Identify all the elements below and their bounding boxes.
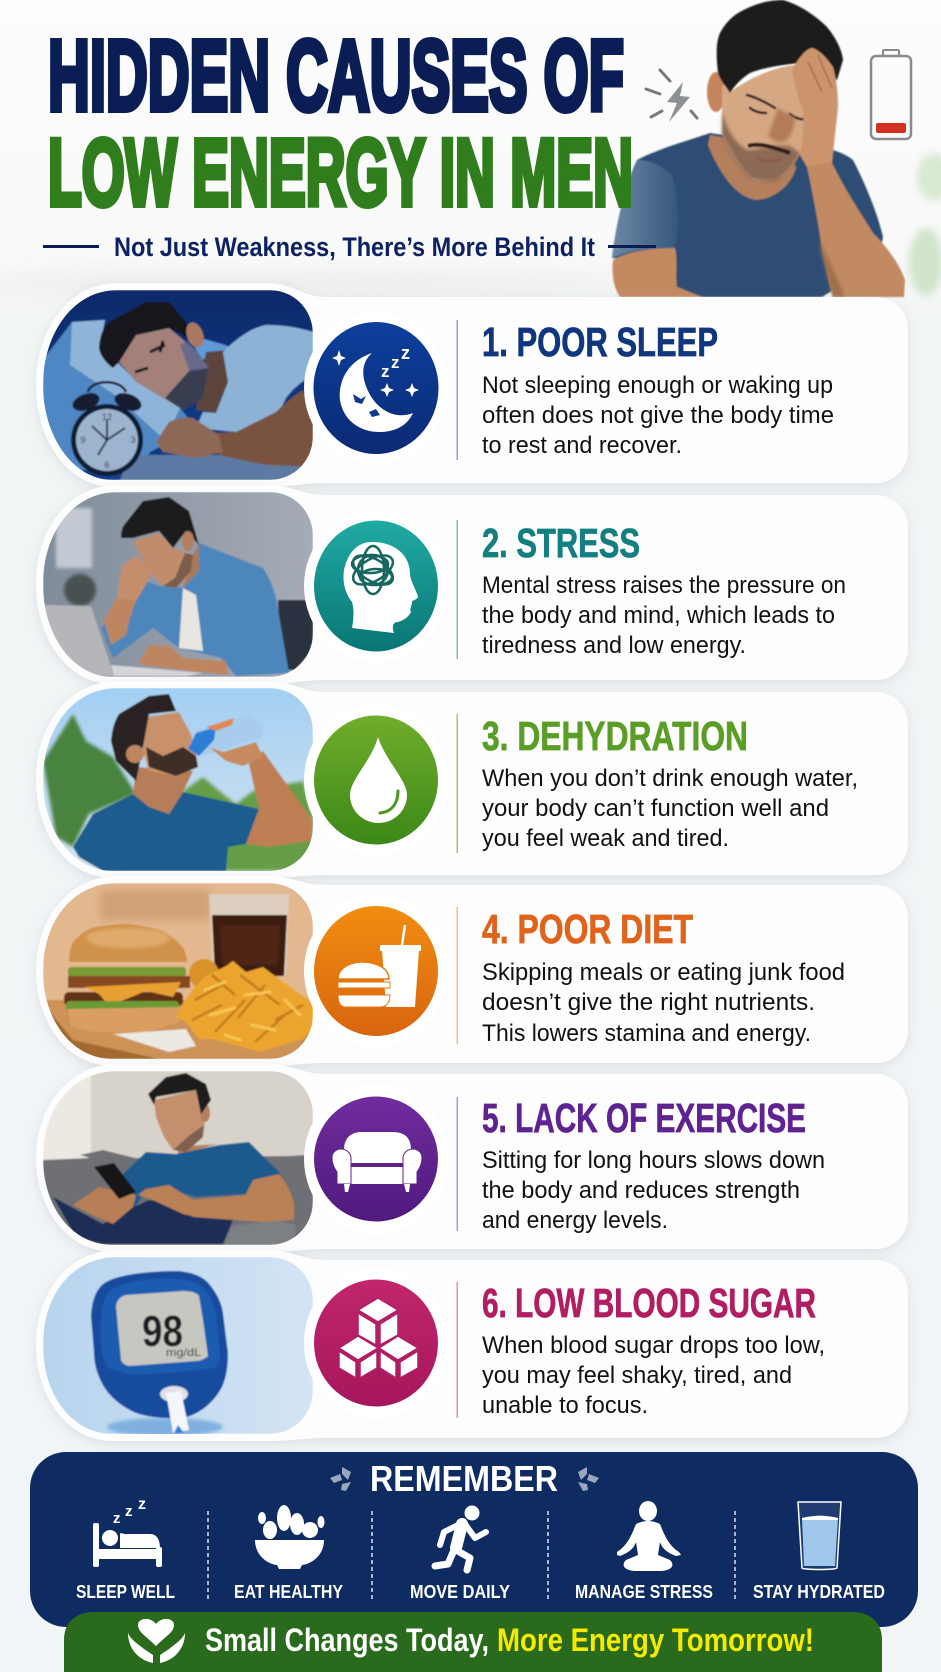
icon: running figure (435, 1506, 486, 1570)
panel: closing banner (64, 1612, 882, 1672)
panel: 2 stress (36, 485, 908, 684)
icon: moon and zzz: z (401, 343, 410, 363)
photo: glucose meter showing 98 mg/dL: mg/dL (166, 1347, 201, 1359)
text block (482, 572, 846, 659)
text block: tiredness and low energy. (482, 632, 746, 659)
label: SLEEP WELL (76, 1582, 175, 1602)
photo: glucose meter showing 98 mg/dL (43, 1257, 313, 1436)
icon: moon and zzz: z (381, 362, 390, 381)
panel: 4 poor diet (36, 876, 908, 1066)
text block: This lowers stamina and energy. (482, 1020, 811, 1047)
label: STAY HYDRATED (753, 1582, 885, 1602)
panel: 6 low blood sugar (36, 1250, 908, 1441)
heading: remember: REMEMBER (370, 1458, 558, 1499)
text block: Mental stress raises the pressure on (482, 572, 846, 599)
heading: 3. DEHYDRATION (482, 713, 748, 759)
photo: man awake in bed: 9 (80, 435, 86, 445)
text block (482, 959, 845, 1047)
photo: burger, fries and cola (43, 883, 313, 1059)
text block: Sitting for long hours slows down (482, 1147, 825, 1174)
photo: glucose meter showing 98 mg/dL: 98 (142, 1307, 183, 1356)
photo: stressed man at laptop (43, 492, 313, 677)
photo: man drinking water (43, 688, 313, 871)
icon: bed with zzz: z (138, 1496, 146, 1513)
panel: remember (30, 1452, 918, 1627)
text block (482, 1147, 825, 1234)
text block: the body and mind, which leads to (482, 602, 835, 629)
text block (482, 765, 858, 852)
man holding forehead (612, 0, 905, 297)
photo: man awake in bed: 12 (102, 412, 112, 422)
text block: to rest and recover. (482, 432, 682, 459)
text block: Not sleeping enough or waking up (482, 372, 833, 399)
panel: 1 poor sleep (36, 283, 908, 487)
tagline: Small Changes Today, (205, 1622, 489, 1658)
icon: burger and drink (304, 895, 448, 1047)
icon: bed with zzz: z (125, 1503, 132, 1520)
icon: low battery (871, 50, 911, 139)
panel: 3 dehydration (36, 681, 908, 878)
photo: man awake in bed: 3 (130, 435, 136, 445)
icon: salad bowl (255, 1505, 324, 1569)
text block: Skipping meals or eating junk food (482, 959, 845, 986)
icon: bed with zzz (93, 1496, 162, 1567)
tagline (205, 1622, 814, 1658)
tagline: More Energy Tomorrow! (497, 1622, 814, 1658)
text block: your body can’t function well and (482, 795, 829, 822)
text block: unable to focus. (482, 1392, 648, 1419)
icon: meditating figure (617, 1501, 681, 1571)
text block (482, 1332, 825, 1419)
text block: When blood sugar drops too low, (482, 1332, 825, 1359)
icon: moon and zzz: z (391, 353, 400, 372)
heading: 4. POOR DIET (482, 906, 693, 952)
heading: 5. LACK OF EXERCISE (482, 1095, 806, 1141)
icon: hands holding heart (128, 1619, 185, 1663)
icon: glass of water (798, 1502, 841, 1570)
panel: 5 lack of exercise (36, 1064, 908, 1252)
text block: the body and reduces strength (482, 1177, 800, 1204)
label: EAT HEALTHY (234, 1582, 343, 1602)
icon: sugar cubes (304, 1267, 448, 1419)
title (48, 20, 633, 226)
icon: moon and zzz (304, 312, 448, 464)
label: MANAGE STRESS (575, 1582, 713, 1602)
label: MOVE DAILY (410, 1582, 510, 1602)
decorative leaves (330, 1467, 599, 1491)
icon: water drop (304, 704, 448, 856)
text block: often does not give the body time (482, 402, 834, 429)
icon: bed with zzz: z (113, 1510, 120, 1527)
icon: head with tangled thoughts (304, 510, 448, 662)
photo: man awake in bed (43, 290, 313, 480)
text block (482, 372, 834, 459)
text block: doesn’t give the right nutrients. (482, 989, 815, 1016)
photo: man awake in bed: 6 (104, 460, 110, 470)
photo: man on sofa with phone (43, 1071, 313, 1245)
text block: you feel weak and tired. (482, 825, 729, 852)
heading: 1. POOR SLEEP (482, 319, 718, 365)
text block: When you don’t drink enough water, (482, 765, 858, 792)
icon: sofa (304, 1083, 448, 1235)
text block: and energy levels. (482, 1207, 668, 1234)
heading: 6. LOW BLOOD SUGAR (482, 1280, 816, 1326)
subtitle: Not Just Weakness, There’s More Behind It (114, 232, 595, 262)
text block: you may feel shaky, tired, and (482, 1362, 792, 1389)
icon: lightning bolt (646, 70, 697, 122)
heading: 2. STRESS (482, 520, 640, 566)
